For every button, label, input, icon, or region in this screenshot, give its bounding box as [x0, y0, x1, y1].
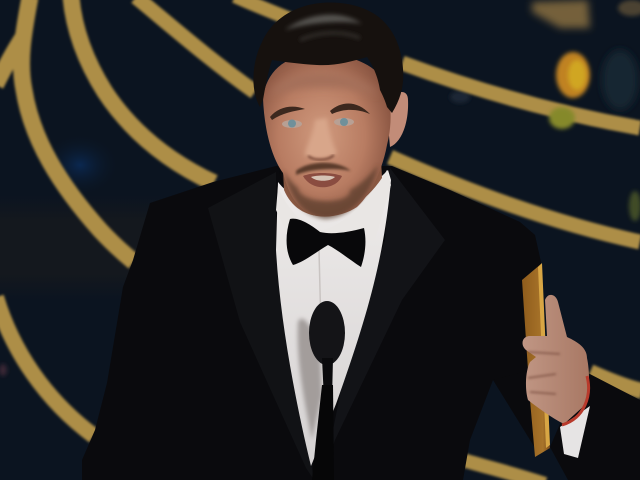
jacket left lapel	[208, 172, 314, 480]
shirt collar	[276, 170, 391, 240]
right sleeve	[550, 372, 640, 480]
gold envelope	[522, 263, 550, 457]
microphone	[309, 301, 345, 480]
forehead shading	[270, 72, 380, 95]
right eyebrow	[330, 103, 370, 114]
head	[253, 3, 408, 219]
bow tie	[287, 219, 365, 267]
microphone shadow on shirt	[298, 319, 322, 440]
ear	[386, 92, 408, 147]
neck	[282, 140, 382, 216]
hand holding envelope	[523, 295, 589, 425]
blurred stage lights	[532, 0, 640, 221]
tuxedo jacket	[82, 166, 640, 480]
jacket right lapel	[325, 168, 445, 470]
nose	[305, 118, 337, 159]
hair	[253, 3, 403, 113]
left eye	[282, 120, 302, 128]
arm below hand	[493, 370, 540, 448]
mouth	[303, 173, 342, 187]
moustache	[296, 163, 351, 175]
hair highlight	[285, 15, 362, 30]
right eye	[334, 118, 354, 126]
beard	[283, 165, 378, 219]
white dress shirt	[276, 170, 391, 466]
shirt cuff	[560, 406, 590, 458]
left eyebrow	[270, 107, 305, 120]
red wristband	[562, 376, 589, 425]
face	[263, 54, 391, 217]
